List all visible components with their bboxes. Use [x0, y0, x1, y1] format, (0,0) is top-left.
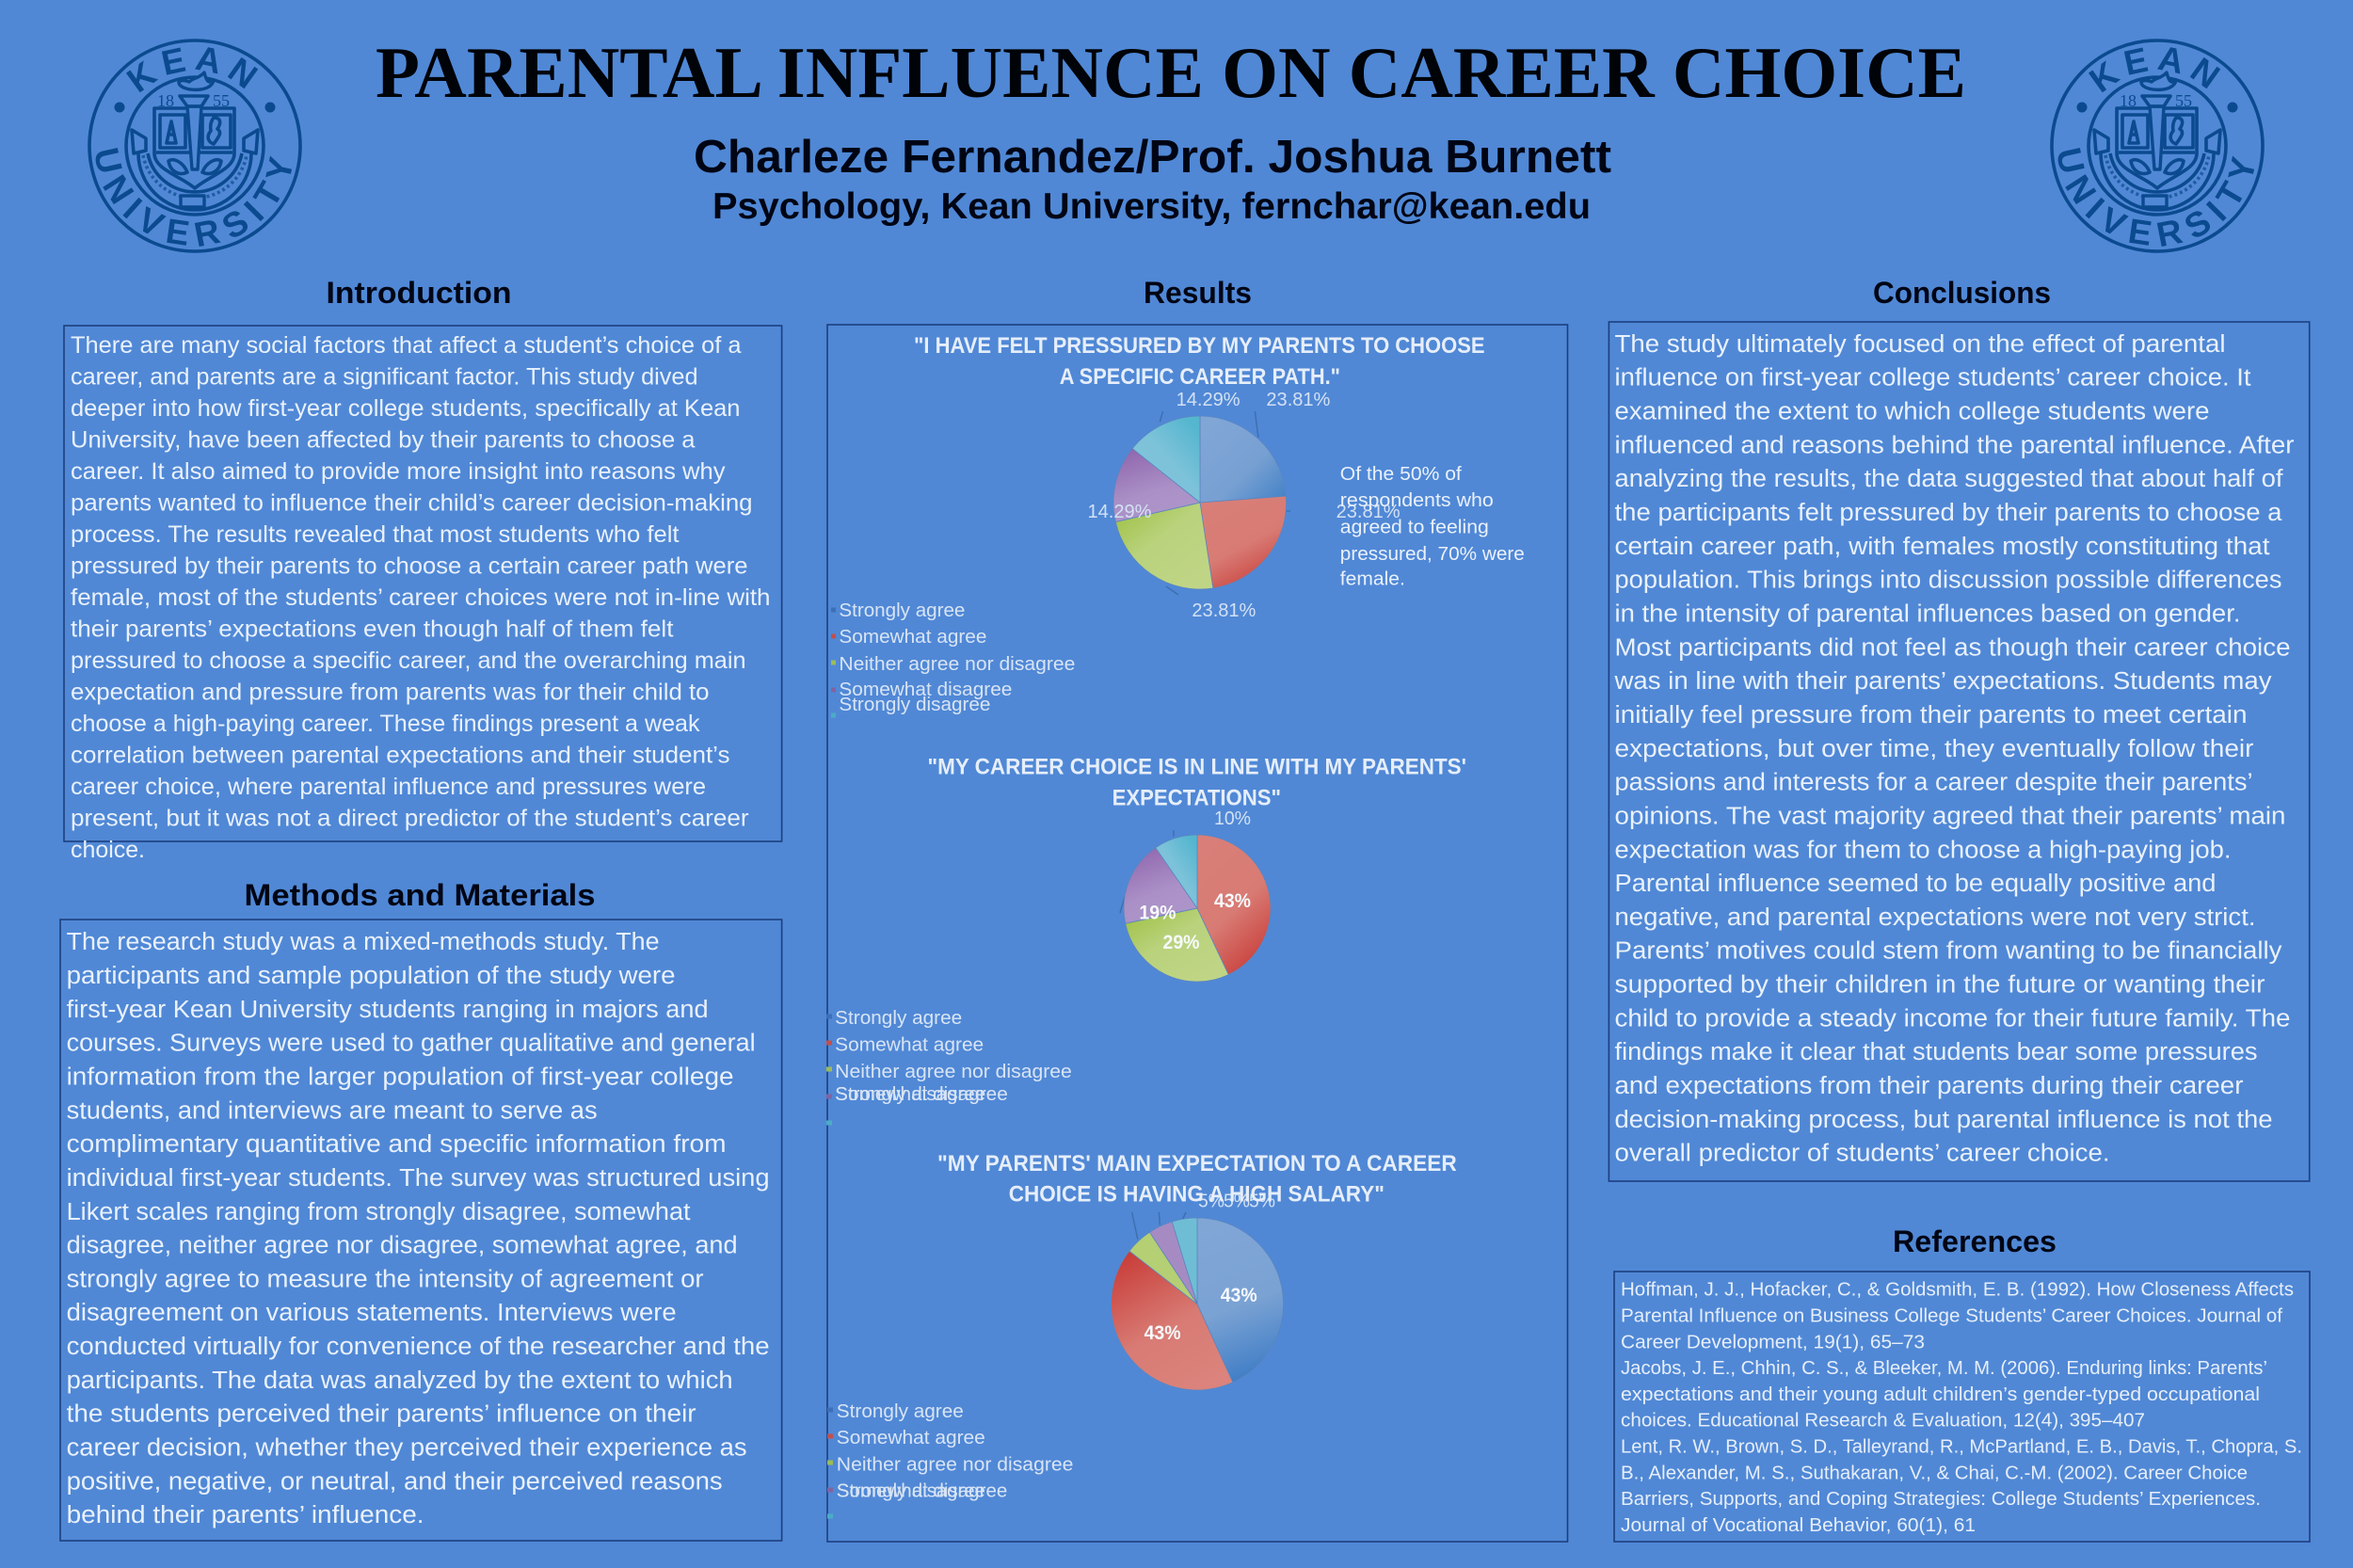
- conclusions text: population. This brings into discussion possible differences: [1615, 566, 2281, 594]
- panel: results: [826, 325, 1568, 1542]
- introduction text: career choice, where parental influence and pressures were: [71, 775, 706, 800]
- chart 3 title: CHOICE IS HAVING A HIGH SALARY": [1009, 1182, 1385, 1208]
- introduction text: parents wanted to influence their child’s career decision-making: [71, 491, 753, 516]
- conclusions text: influenced and reasons behind the parental influence. After: [1615, 430, 2295, 458]
- icon: Kean University seal, left: 55: [213, 91, 230, 110]
- chart 2 data labels: 29%: [1163, 932, 1200, 953]
- chart 3 data labels: [1144, 1285, 1257, 1344]
- introduction text: choice.: [71, 838, 145, 863]
- references text: [1621, 1280, 2302, 1536]
- introduction text: present, but it was not a direct predictor of the student’s career: [71, 806, 749, 832]
- introduction text: expectation and pressure from parents was for their child to: [71, 680, 710, 706]
- conclusions text: supported by their children in the future or wanting their: [1615, 970, 2265, 999]
- references text: Parental Influence on Business College Students’ Career Choices. Journal of: [1621, 1306, 2282, 1327]
- chart 3 legend: Somewhat disagree: [837, 1481, 1007, 1502]
- conclusions text: influence on first-year college students’ career choice. It: [1615, 363, 2251, 392]
- chart 3 legend: Strongly disagree: [837, 1481, 985, 1502]
- introduction text: deeper into how first-year college students, specifically at Kean: [71, 396, 740, 422]
- methods text: [67, 927, 770, 1528]
- conclusions text: examined the extent to which college students were: [1615, 397, 2210, 425]
- methods text: individual first-year students. The survey was structured using: [67, 1163, 770, 1192]
- methods text: positive, negative, or neutral, and their perceived reasons: [67, 1466, 723, 1495]
- chart 1 legend: Somewhat disagree: [839, 680, 1012, 700]
- chart 3 overlapping labels: 5%: [1249, 1192, 1275, 1212]
- chart 3 data labels: 43%: [1221, 1285, 1257, 1306]
- conclusions text: initially feel pressure from their parents to meet certain: [1615, 700, 2248, 728]
- methods text: disagreement on various statements. Interviews were: [67, 1298, 677, 1326]
- chart 1 title: [914, 333, 1485, 390]
- heading: Results: Results: [1144, 276, 1252, 310]
- panel: conclusions: [1609, 322, 2310, 1181]
- conclusions text: child to provide a steady income for their future family. The: [1615, 1003, 2291, 1032]
- icon: Kean University seal, left: [88, 39, 302, 253]
- chart 1 data labels: 14.29%: [1088, 502, 1152, 522]
- chart 2 data labels: 10%: [1214, 808, 1251, 829]
- references text: B., Alexander, M. S., Suthakaran, V., & Chai, C.-M. (2002). Career Choice: [1621, 1463, 2248, 1483]
- panel: introduction: [64, 326, 782, 863]
- methods text: career decision, whether they perceived their experience as: [67, 1433, 747, 1462]
- conclusions text: was in line with their parents’ expectations. Students may: [1613, 666, 2272, 695]
- methods text: first-year Kean University students ranging in majors and: [67, 995, 709, 1023]
- methods text: Likert scales ranging from strongly disagree, somewhat: [67, 1197, 691, 1225]
- chart 1 leader lines: [1160, 411, 1290, 595]
- conclusions text: The study ultimately focused on the effect of parental: [1615, 329, 2225, 358]
- chart 1 legend: Strongly disagree: [839, 695, 990, 715]
- conclusions text: negative, and parental expectations were not very strict.: [1615, 903, 2255, 931]
- chart 2 legend: Strongly agree: [835, 1008, 962, 1029]
- icon: Kean University seal, left: KEAN: [126, 47, 258, 92]
- callout: 70% female: pressured, 70% were: [1340, 544, 1525, 565]
- icon: Kean University seal, right: UNIVERSITY: [2057, 148, 2254, 247]
- heading: Introduction: Introduction: [326, 276, 512, 310]
- chart 3 title: [937, 1151, 1457, 1208]
- conclusions text: in the intensity of parental influences based on gender.: [1615, 599, 2240, 627]
- introduction text: choose a high-paying career. These findings present a weak: [71, 712, 700, 737]
- conclusions text: overall predictor of students’ career choice.: [1615, 1139, 2110, 1167]
- chart 2 data labels: 19%: [1139, 903, 1176, 924]
- references text: Career Development, 19(1), 65–73: [1621, 1332, 1925, 1352]
- chart 3 overlapping labels: 5%: [1198, 1192, 1225, 1212]
- introduction text: University, have been affected by their parents to choose a: [71, 427, 696, 454]
- methods text: strongly agree to measure the intensity of agreement or: [67, 1264, 704, 1292]
- references text: Barriers, Supports, and Coping Strategies: College Students’ Experiences.: [1621, 1489, 2261, 1510]
- introduction text: pressured by their parents to choose a certain career path were: [71, 553, 747, 580]
- chart 2: career choice in line with expectations: [826, 755, 1466, 1126]
- icon: Kean University seal, right: 18: [2120, 91, 2137, 110]
- introduction text: [71, 333, 770, 863]
- methods text: students, and interviews are meant to serve as: [67, 1096, 598, 1124]
- chart 1 title: A SPECIFIC CAREER PATH.": [1060, 364, 1340, 390]
- introduction text: their parents’ expectations even though half of them felt: [71, 617, 674, 642]
- icon: Kean University seal, left: UNIVERSITY: [96, 148, 292, 247]
- chart 2 legend: [826, 1008, 1072, 1126]
- chart 1 legend: Strongly agree: [839, 600, 965, 621]
- chart 1 data labels: 14.29%: [1176, 390, 1241, 410]
- callout: 70% female: Of the 50% of: [1340, 464, 1462, 485]
- introduction text: correlation between parental expectations and their student’s: [71, 744, 730, 768]
- introduction text: process. The results revealed that most students who felt: [71, 522, 680, 548]
- pie chart 2: [1124, 835, 1271, 982]
- panel: references: [1614, 1272, 2310, 1542]
- methods text: information from the larger population of first-year college: [67, 1063, 734, 1091]
- callout: 70% female: respondents who: [1340, 490, 1494, 511]
- methods text: behind their parents’ influence.: [67, 1500, 424, 1528]
- conclusions text: opinions. The vast majority agreed that their parents’ main: [1615, 801, 2285, 829]
- references text: Hoffman, J. J., Hofacker, C., & Goldsmith, E. B. (1992). How Closeness Affects: [1621, 1280, 2294, 1301]
- conclusions text: decision-making process, but parental influence is not the: [1615, 1105, 2272, 1133]
- chart 2 data labels: 43%: [1214, 890, 1251, 912]
- introduction text: career. It also aimed to provide more insight into reasons why: [71, 459, 726, 485]
- methods text: conducted virtually for convenience of the researcher and the: [67, 1332, 770, 1360]
- references text: Lent, R. W., Brown, S. D., Talleyrand, R., McPartland, E. B., Davis, T., Chopra, S.: [1621, 1436, 2302, 1457]
- chart 3 legend: Somewhat agree: [837, 1428, 985, 1448]
- conclusions text: certain career path, with females mostly constituting that: [1615, 532, 2270, 560]
- conclusions text: Parents’ motives could stem from wanting to be financially: [1615, 936, 2282, 965]
- icon: Kean University seal, left: 18: [157, 91, 174, 110]
- methods text: courses. Surveys were used to gather qualitative and general: [67, 1029, 756, 1057]
- affiliation: Psychology, Kean University, fernchar@kean.edu: [712, 186, 1591, 227]
- chart 3 legend: [827, 1401, 1073, 1519]
- conclusions text: findings make it clear that students bear some pressures: [1615, 1037, 2257, 1065]
- conclusions text: expectations, but over time, they eventually follow their: [1615, 734, 2254, 762]
- introduction text: female, most of the students’ career choices were not in-line with: [71, 585, 770, 611]
- conclusions text: Parental influence seemed to be equally positive and: [1615, 869, 2216, 897]
- conclusions text: Most participants did not feel as though their career choice: [1615, 632, 2291, 661]
- methods text: participants and sample population of the study were: [67, 961, 676, 989]
- chart 3 leader lines: [1132, 1212, 1186, 1240]
- authors: Charleze Fernandez/Prof. Joshua Burnett: [694, 132, 1611, 183]
- icon: Kean University seal, right: KEAN: [2089, 47, 2221, 92]
- chart 1 data labels: 23.81%: [1337, 502, 1401, 522]
- references text: expectations and their young adult children’s gender-typed occupational: [1621, 1384, 2260, 1405]
- chart 1 legend: [831, 600, 1075, 717]
- chart 1 legend: Somewhat agree: [839, 627, 986, 648]
- chart 2 title: "MY CAREER CHOICE IS IN LINE WITH MY PARENTS': [928, 755, 1466, 780]
- chart 3 title: "MY PARENTS' MAIN EXPECTATION TO A CAREER: [937, 1151, 1457, 1176]
- introduction text: There are many social factors that affect a student’s choice of a: [71, 333, 742, 359]
- chart 2 title: [928, 755, 1466, 811]
- chart 1 title: "I HAVE FELT PRESSURED BY MY PARENTS TO CHOOSE: [914, 333, 1485, 359]
- chart 2 title: EXPECTATIONS": [1112, 786, 1281, 811]
- heading: References: References: [1893, 1224, 2057, 1258]
- conclusions text: and expectations from their parents during their career: [1615, 1071, 2244, 1099]
- pie chart 3: [1112, 1218, 1284, 1390]
- chart 2 legend: Strongly disagree: [835, 1084, 985, 1105]
- chart 3 data labels: 43%: [1144, 1322, 1181, 1344]
- chart 3 overlapping labels: 5%: [1224, 1192, 1250, 1212]
- chart 2 legend: Somewhat agree: [835, 1035, 984, 1056]
- callout: 70% female: [1340, 464, 1525, 590]
- methods text: disagree, neither agree nor disagree, somewhat agree, and: [67, 1231, 738, 1259]
- chart 1 data labels: [1088, 390, 1401, 621]
- chart 2 legend: Somewhat disagree: [835, 1084, 1008, 1105]
- methods text: The research study was a mixed-methods study. The: [67, 927, 660, 955]
- conclusions text: the participants felt pressured by their parents to choose a: [1615, 498, 2282, 526]
- chart 3 legend: Neither agree nor disagree: [837, 1455, 1073, 1476]
- chart 3: main expectation is a high salary: [827, 1151, 1457, 1519]
- panel: methods and materials: [60, 920, 782, 1541]
- references text: Journal of Vocational Behavior, 60(1), 61: [1621, 1515, 1976, 1536]
- introduction text: pressured to choose a specific career, and the overarching main: [71, 648, 745, 674]
- chart 1 data labels: 23.81%: [1266, 390, 1331, 410]
- methods text: the students perceived their parents’ influence on their: [67, 1400, 696, 1428]
- conclusions text: passions and interests for a career despite their parents’: [1615, 768, 2253, 796]
- introduction text: career, and parents are a significant factor. This study dived: [71, 365, 698, 390]
- methods text: complimentary quantitative and specific information from: [67, 1129, 727, 1158]
- methods text: participants. The data was analyzed by the extent to which: [67, 1366, 733, 1394]
- heading: Conclusions: Conclusions: [1873, 276, 2051, 310]
- conclusions text: analyzing the results, the data suggested that about half of: [1615, 464, 2283, 492]
- chart 2 data labels: [1139, 808, 1251, 953]
- chart 1: pressured by parents: [831, 333, 1525, 717]
- chart 1 legend: Neither agree nor disagree: [839, 654, 1075, 675]
- chart 3 legend: Strongly agree: [837, 1401, 964, 1422]
- conclusions text: [1613, 329, 2295, 1167]
- conclusions text: expectation was for them to choose a high-paying job.: [1615, 835, 2231, 863]
- heading: Methods and Materials: Methods and Materials: [245, 878, 595, 912]
- references text: Jacobs, J. E., Chhin, C. S., & Bleeker, M. M. (2006). Enduring links: Parents’: [1621, 1358, 2267, 1379]
- icon: Kean University seal, right: [2050, 39, 2265, 253]
- chart 2 leader lines: [1120, 830, 1174, 913]
- callout: 70% female: female.: [1340, 569, 1405, 590]
- references text: choices. Educational Research & Evaluation, 12(4), 395–407: [1621, 1411, 2145, 1432]
- icon: Kean University seal, right: 55: [2175, 91, 2192, 110]
- callout: 70% female: agreed to feeling: [1340, 518, 1489, 538]
- pie chart 1: [1113, 416, 1287, 589]
- chart 1 data labels: 23.81%: [1192, 600, 1257, 621]
- chart 2 legend: Neither agree nor disagree: [835, 1062, 1072, 1082]
- chart 3 overlapping labels: [1198, 1192, 1275, 1212]
- title: PARENTAL INFLUENCE ON CAREER CHOICE: [376, 32, 1966, 113]
